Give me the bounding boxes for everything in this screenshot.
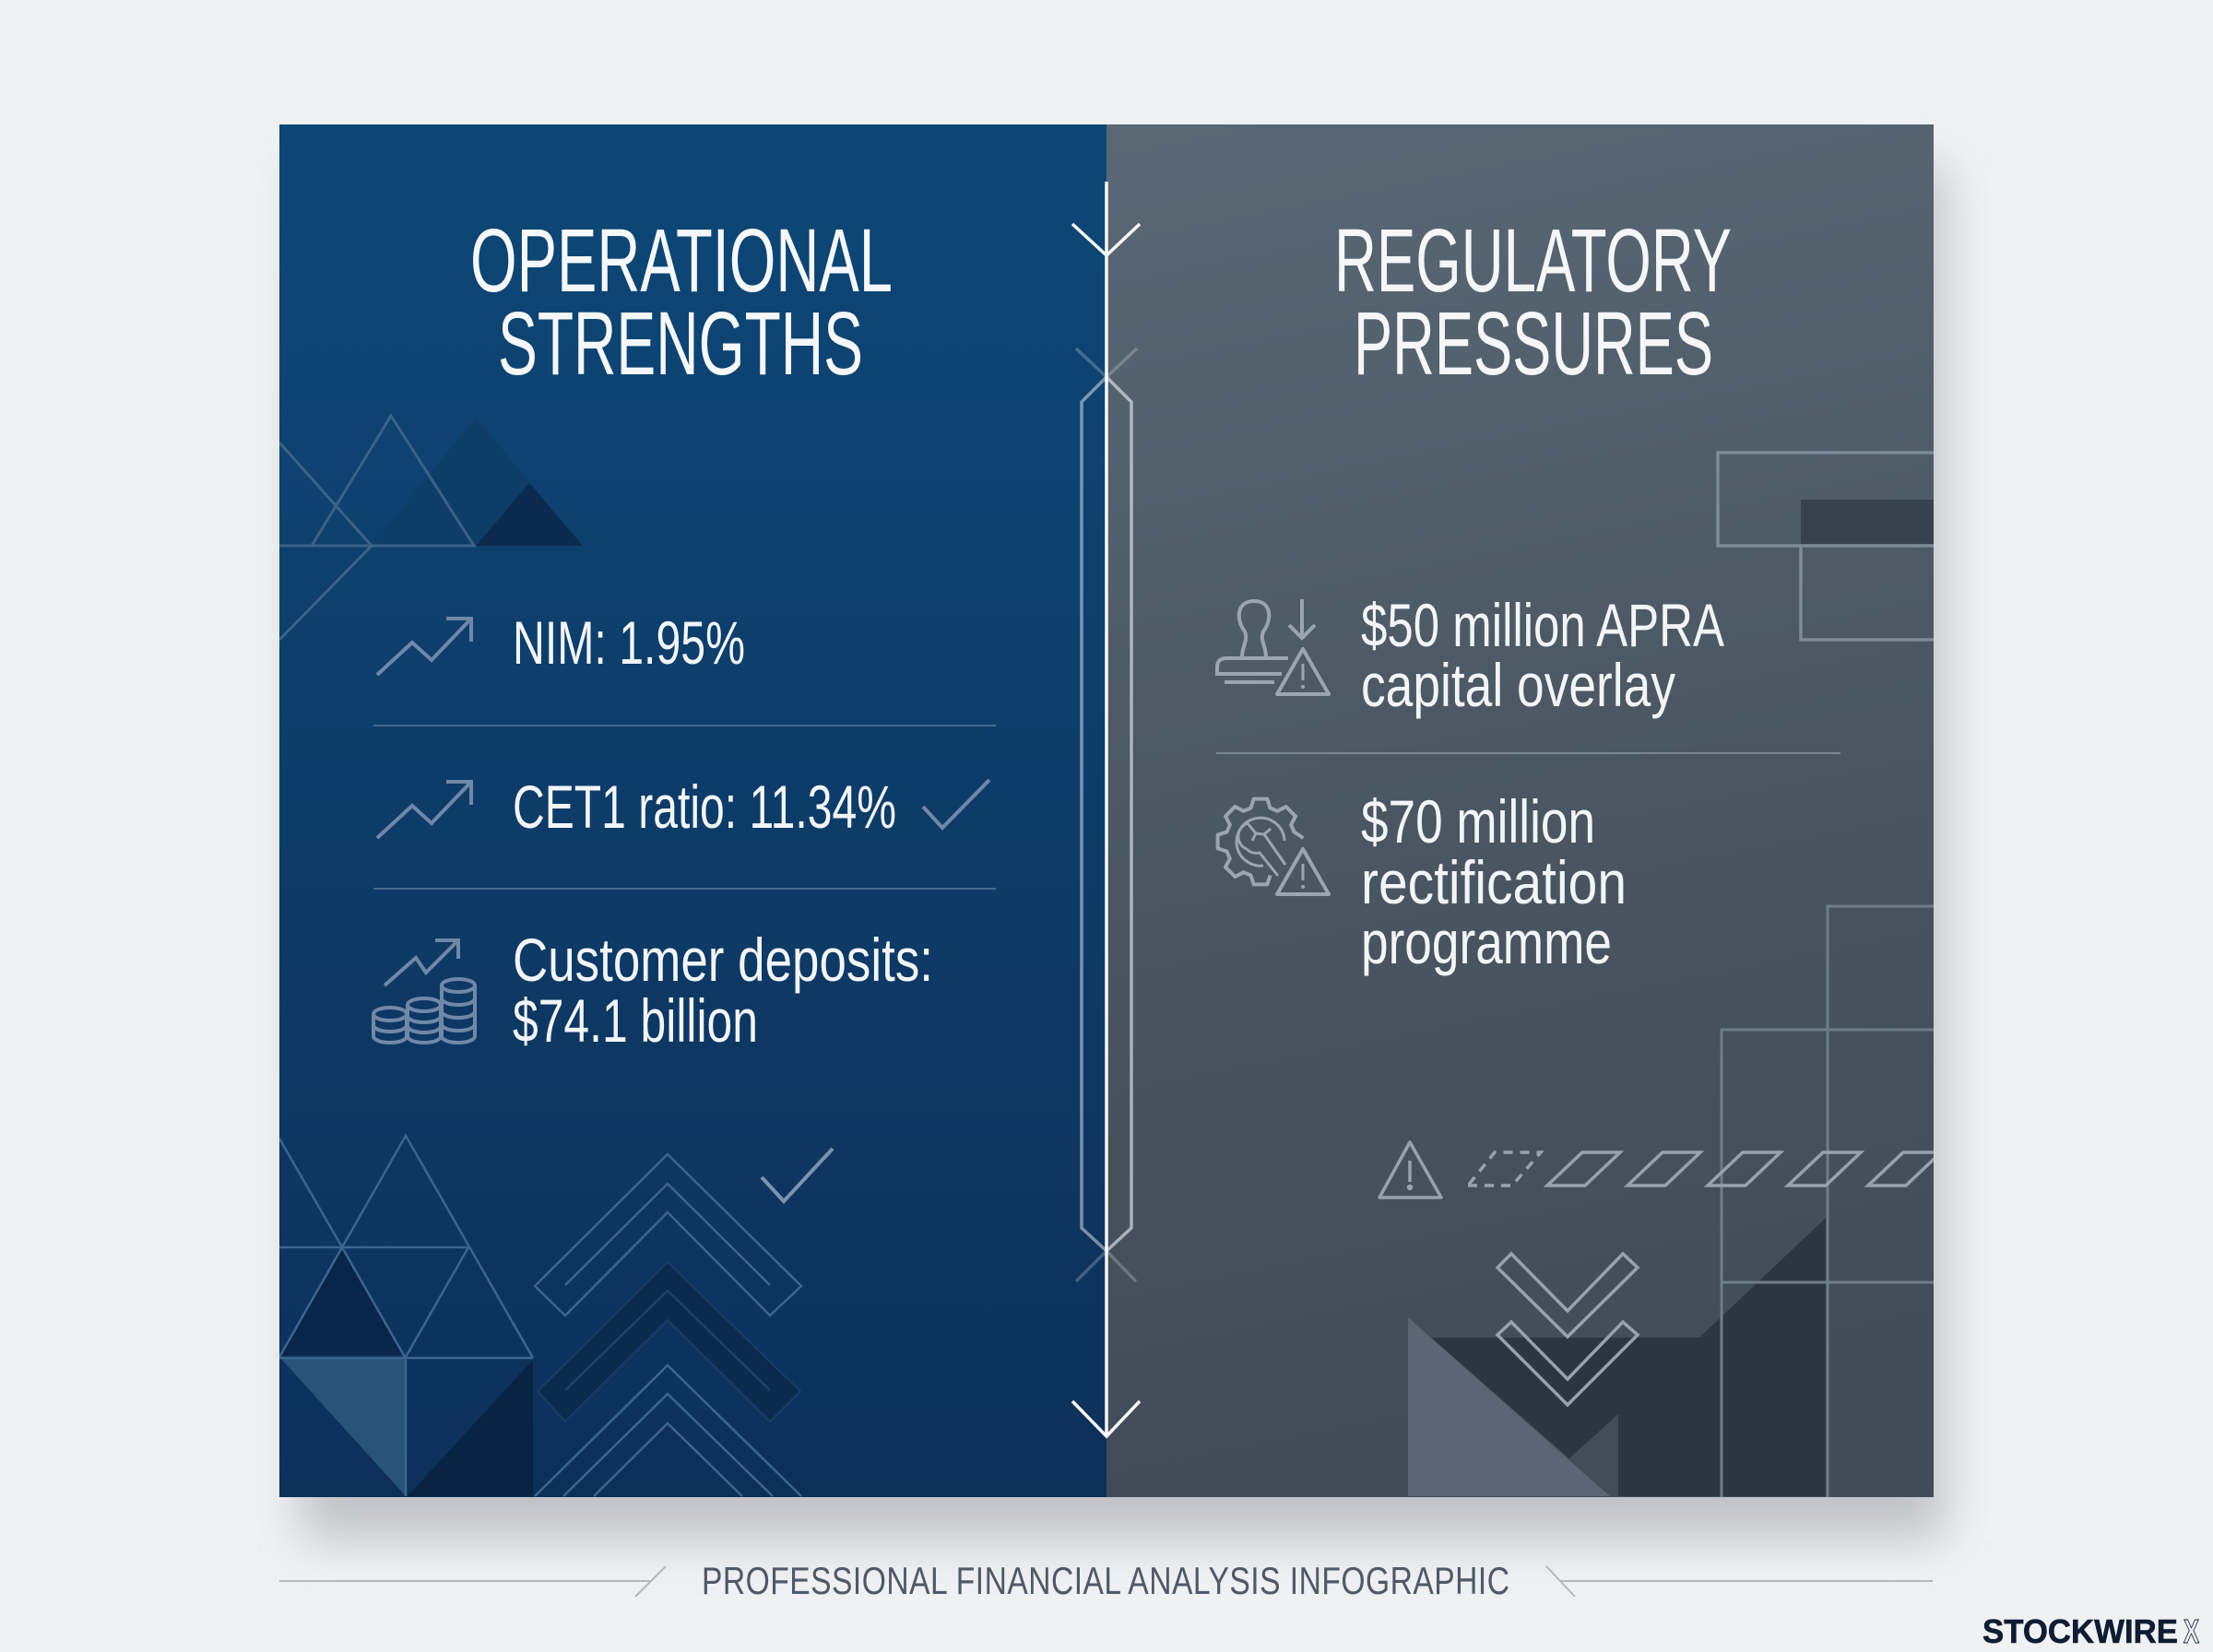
- top-right block decoration: [1718, 453, 1934, 640]
- vertical arrow line: [1072, 182, 1140, 1436]
- divider one: [373, 725, 996, 726]
- parallelogram progress row: [1468, 1152, 1941, 1186]
- centre arrow divider: [1072, 182, 1140, 1436]
- icon: gear wrench with warning: [1218, 799, 1329, 894]
- metric: customer deposits: Customer deposits:: [513, 926, 933, 994]
- metric: APRA capital overlay: [1361, 591, 1724, 719]
- panel: regulatory pressures: [1106, 124, 1941, 1497]
- panel: operational strengths: [279, 124, 1106, 1497]
- hexagon bracket: [1076, 348, 1137, 1281]
- logo: StockwireX: X: [2183, 1612, 2199, 1650]
- icon: warning triangle: [1379, 1142, 1441, 1198]
- icon: coins and trend arrow: [373, 940, 475, 1043]
- metric: rectification programme: rectification: [1361, 848, 1627, 916]
- divider: [1216, 752, 1840, 754]
- footer caption: [279, 1561, 1933, 1603]
- icon: stamp with warning: [1217, 599, 1329, 694]
- icon: trend arrow for CET1: [377, 782, 471, 838]
- chevron decoration: [535, 1154, 801, 1496]
- metric: customer deposits: $74.1 billion: [513, 986, 758, 1055]
- bottom-right block decoration: [1408, 906, 1934, 1497]
- metric: NIM: NIM: 1.95%: [513, 608, 745, 677]
- metric: rectification programme: programme: [1361, 908, 1612, 976]
- metric: customer deposits: [513, 926, 933, 1055]
- panel drop shadow: [301, 166, 1946, 1540]
- metric: APRA capital overlay: capital overlay: [1361, 651, 1675, 719]
- heading: regulatory pressures: [1334, 210, 1732, 394]
- top-left triangle decoration: [279, 416, 583, 640]
- heading: regulatory pressures: PRESSURES: [1354, 293, 1713, 394]
- metric: CET1 ratio: CET1 ratio: 11.34%: [513, 773, 896, 841]
- icon: decorative check: [762, 1149, 833, 1201]
- footer caption: PROFESSIONAL FINANCIAL ANALYSIS INFOGRAPHIC: [702, 1561, 1509, 1603]
- heading: operational strengths: STRENGTHS: [498, 293, 863, 394]
- logo: StockwireX: STOCKWIRE: [1982, 1612, 2178, 1650]
- icon: check mark: [923, 780, 989, 828]
- double down chevrons: [1497, 1254, 1638, 1405]
- metric: rectification programme: $70 million: [1361, 787, 1595, 856]
- heading: regulatory pressures: REGULATORY: [1334, 210, 1732, 311]
- metric: APRA capital overlay: $50 million APRA: [1361, 591, 1724, 659]
- divider two: [373, 888, 996, 890]
- icon: trend arrow for NIM: [377, 619, 471, 675]
- heading: operational strengths: OPERATIONAL: [470, 210, 893, 311]
- metric: rectification programme: [1361, 787, 1627, 976]
- bottom-left triangle decoration: [279, 1136, 533, 1496]
- heading: operational strengths: [470, 210, 893, 394]
